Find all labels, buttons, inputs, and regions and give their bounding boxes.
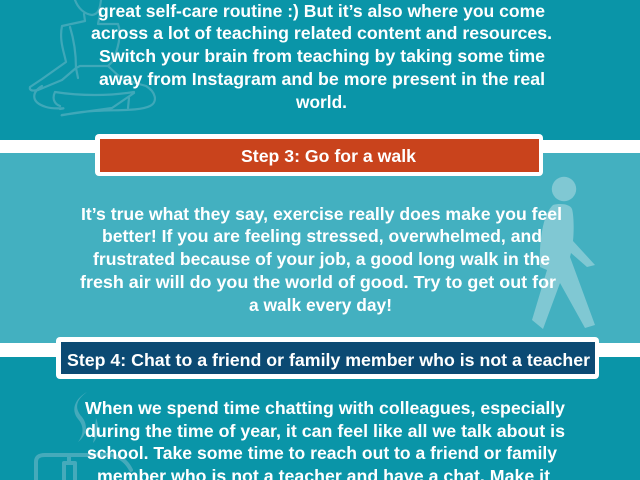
icon: coffee cup <box>36 392 131 480</box>
text block: step 3 <box>80 204 562 315</box>
icon: walking person <box>532 177 595 329</box>
text block: step 3: fresh air will do you the world of good. Try to get out for <box>80 272 556 292</box>
text block: step 2: world. <box>295 92 347 112</box>
heading: step 4 <box>56 337 599 379</box>
text block: step 3: It’s true what they say, exercise really does make you feel <box>81 204 562 224</box>
text block: step 3: better! If you are feeling stressed, overwhelmed, and <box>102 226 542 246</box>
text block: step 2 <box>91 1 552 112</box>
panel: step 3 <box>0 153 640 343</box>
text block: step 3: frustrated because of your job, a good long walk in the <box>93 249 550 269</box>
panel: step 2 continued <box>0 0 640 140</box>
panel: step 4 <box>0 357 640 480</box>
icon: meditating person <box>30 0 155 115</box>
text block: step 2: great self-care routine :) But it’s also where you come <box>98 1 545 21</box>
text block: step 2: across a lot of teaching related content and resources. <box>91 23 552 43</box>
heading: step 3 <box>95 134 543 176</box>
heading: step 3: Step 3: Go for a walk <box>241 146 416 166</box>
text block: step 4: When we spend time chatting with colleagues, especially <box>85 398 565 418</box>
text block: step 4: school. Take some time to reach out to a friend or family <box>87 443 557 463</box>
text block: step 2: Switch your brain from teaching by taking some time <box>99 46 545 66</box>
heading: step 4: Step 4: Chat to a friend or family member who is not a teacher <box>67 350 590 370</box>
text block: step 2: away from Instagram and be more present in the real <box>99 69 545 89</box>
text block: step 4 <box>85 398 565 480</box>
text block: step 3: a walk every day! <box>249 295 392 315</box>
text block: step 4: during the time of year, it can feel like all we talk about is <box>85 421 565 441</box>
